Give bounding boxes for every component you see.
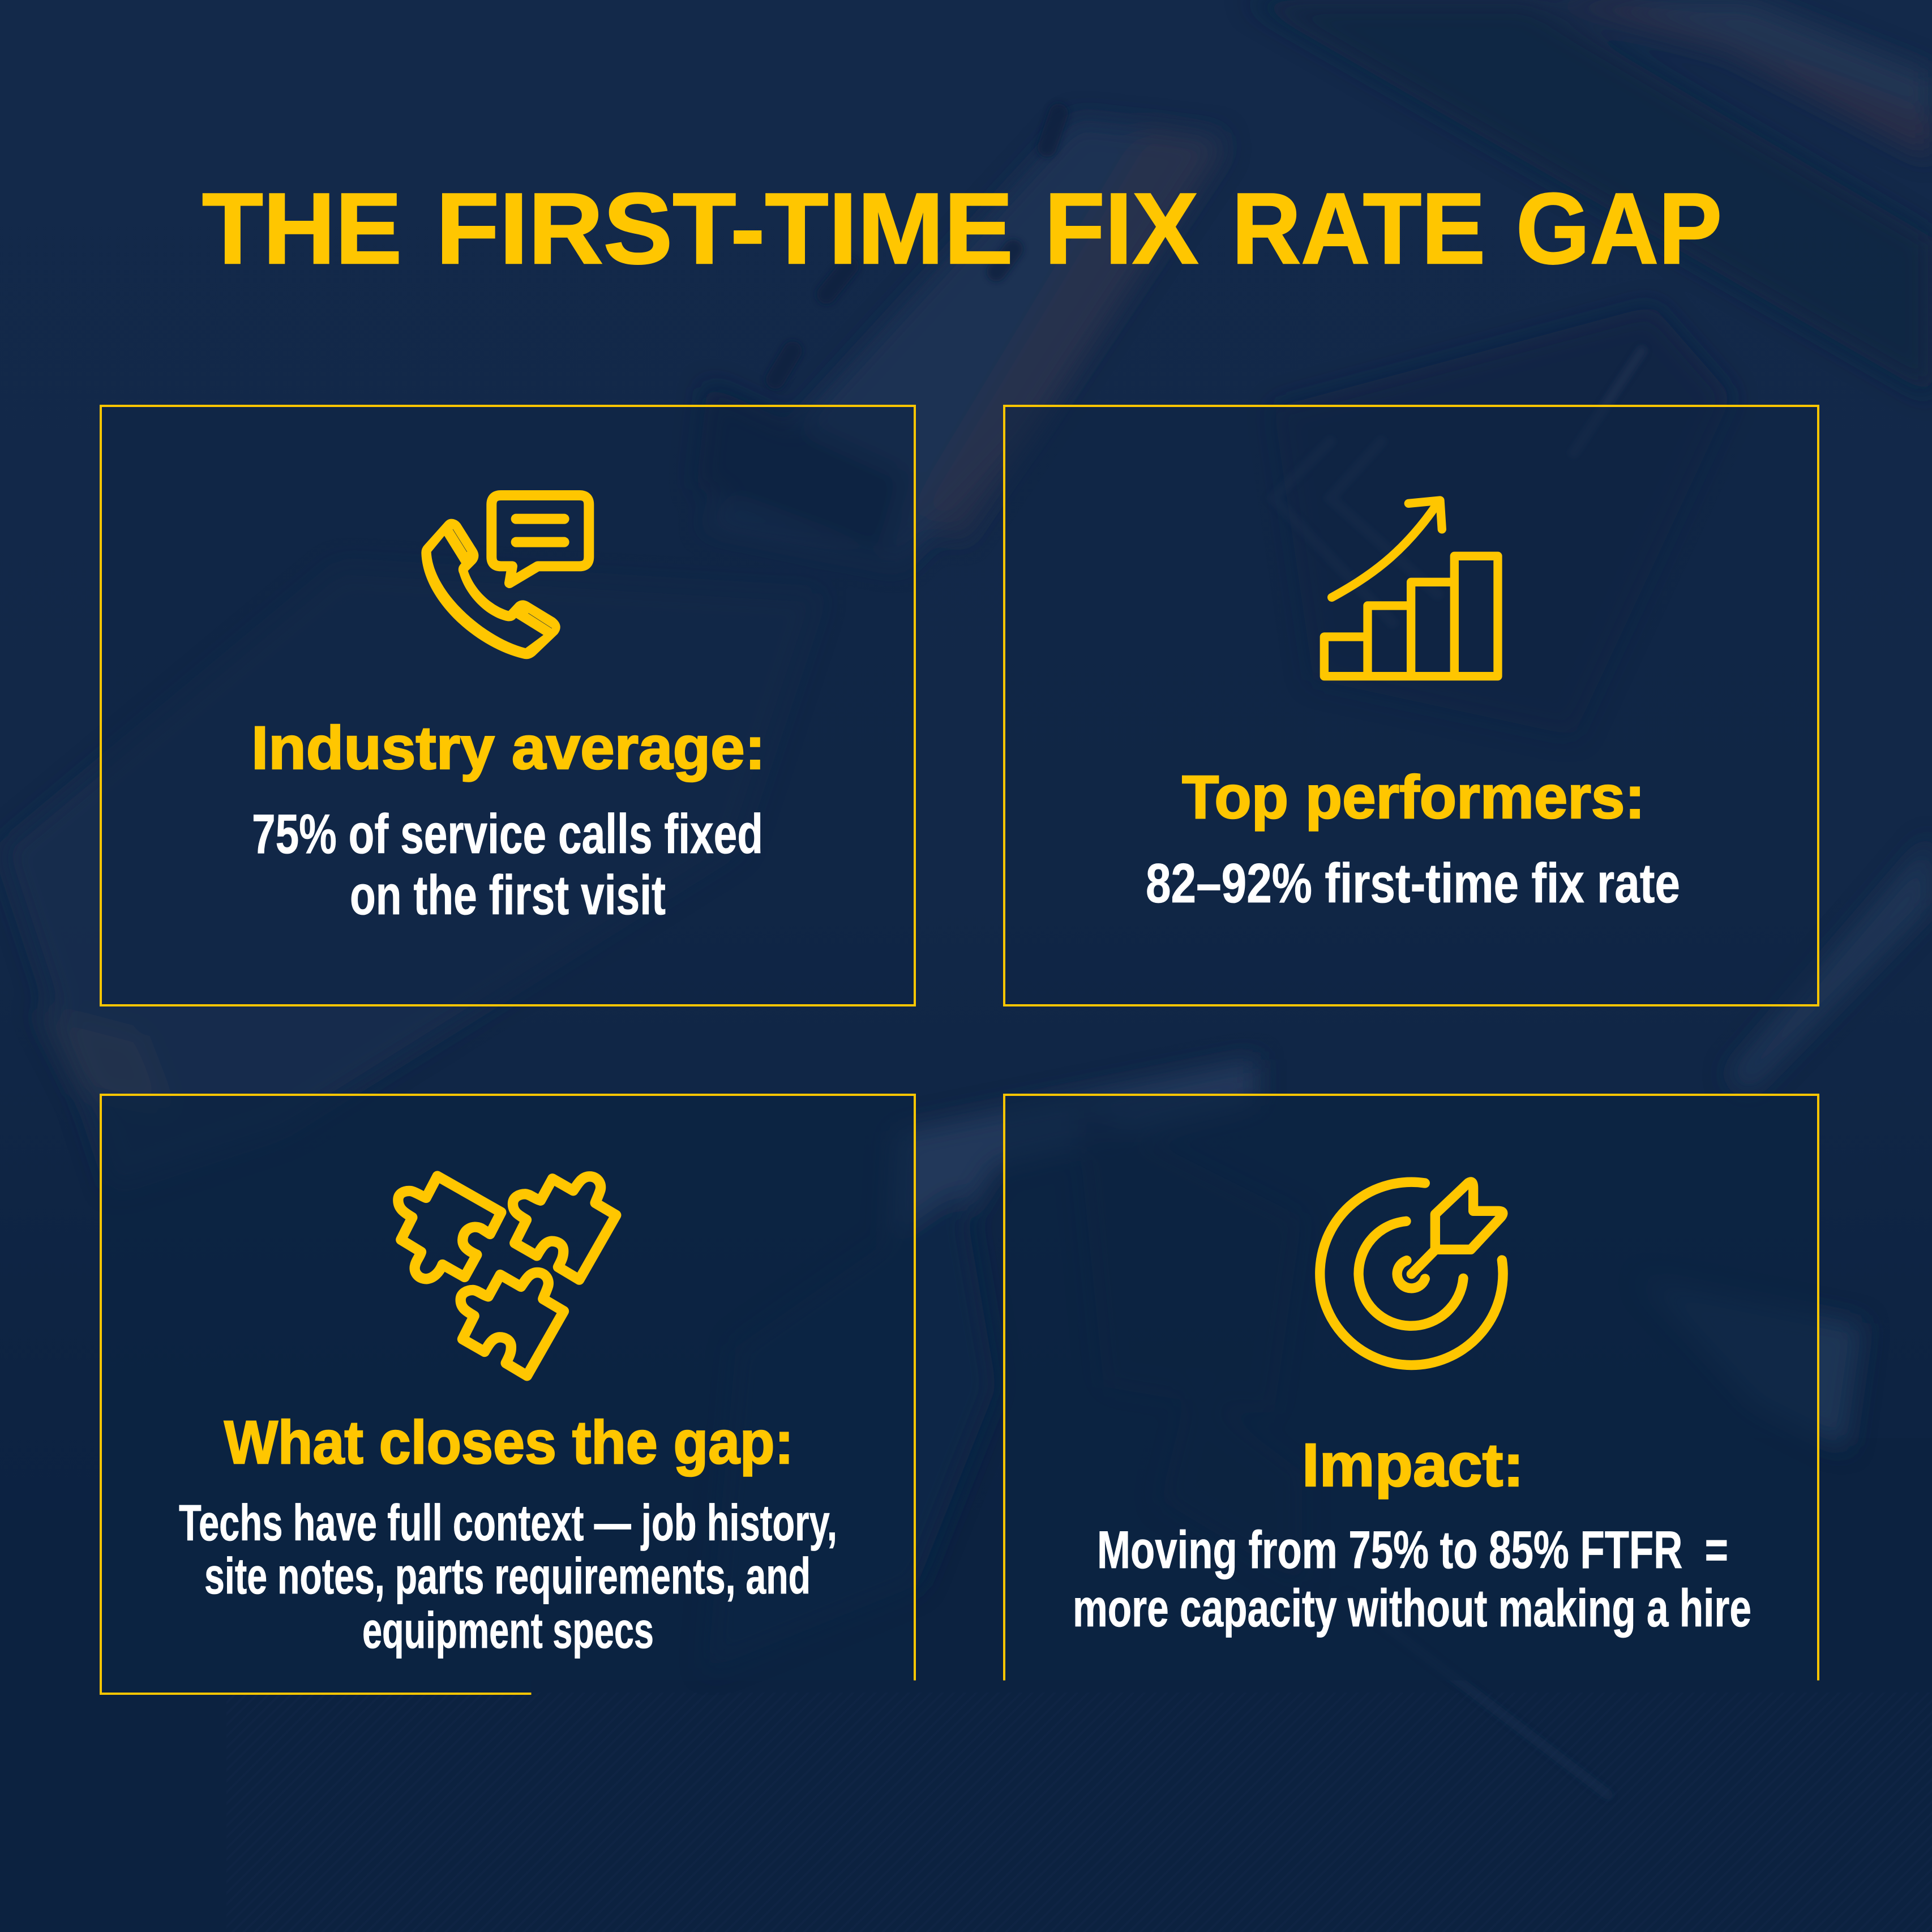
text: industry average detail — [252, 803, 763, 926]
heading: impact: Impact: — [1302, 1430, 1524, 1499]
text: industry average detail: on the first visit — [350, 864, 666, 926]
icon: puzzle pieces — [398, 1176, 616, 1376]
heading: industry average: Industry average: — [251, 713, 765, 782]
panel: top performers — [1004, 406, 1818, 1005]
text: what closes the gap detail: site notes, parts requirements, and — [204, 1548, 811, 1605]
background stripes — [226, 1693, 1932, 1932]
panel: industry average — [101, 406, 915, 1005]
title: RATE — [1232, 172, 1485, 285]
text: impact detail — [1073, 1520, 1751, 1638]
text: what closes the gap detail: Techs have full context — job history, — [179, 1495, 837, 1552]
title: THE — [202, 172, 402, 285]
text: industry average detail: 75% of service calls fixed — [252, 803, 763, 865]
background tool tip: T25 — [92, 1841, 144, 1894]
background tool details — [776, 113, 1642, 1794]
icon: phone with chat bubble — [421, 495, 589, 659]
text: impact detail: Moving from 75% to 85% FTFR = — [1097, 1520, 1728, 1579]
panel: impact — [1004, 1095, 1818, 1694]
title: FIX — [1044, 172, 1198, 285]
background tool tip — [0, 1772, 211, 1932]
heading: top performers: Top performers: — [1182, 762, 1645, 831]
panel: what closes the gap — [101, 1095, 915, 1694]
icon: rising bar chart — [1324, 500, 1498, 676]
title: FIRST-TIME — [436, 172, 1013, 285]
heading: what closes the gap: What closes the gap: — [224, 1408, 794, 1476]
text: top performers detail: 82–92% first-time fix rate — [1146, 852, 1680, 914]
title — [202, 172, 1722, 285]
title: GAP — [1516, 172, 1722, 285]
text: what closes the gap detail: equipment specs — [362, 1603, 654, 1659]
text: what closes the gap detail — [179, 1495, 837, 1659]
icon: target with arrow — [1320, 1182, 1503, 1365]
